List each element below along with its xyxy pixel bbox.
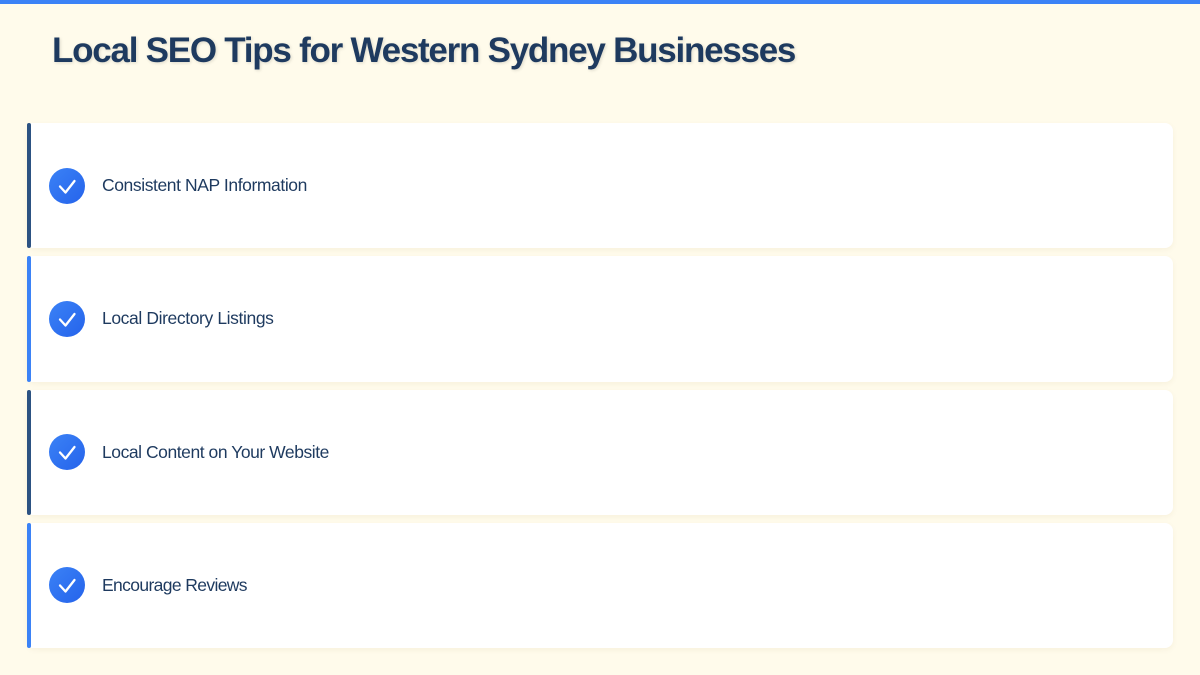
tip text: Consistent NAP Information (102, 175, 307, 195)
panel: encourage reviews (27, 523, 1173, 648)
card accent bar (27, 390, 31, 515)
icon: check mark (49, 567, 85, 603)
title: Local SEO Tips for Western Sydney Businesses (52, 31, 795, 70)
panel: local content on your website (27, 390, 1173, 515)
tip text: Encourage Reviews (102, 575, 247, 595)
tip text: Local Directory Listings (102, 308, 274, 328)
tip text: Local Content on Your Website (102, 442, 329, 462)
icon: check mark (49, 434, 85, 470)
icon: check mark (49, 168, 85, 204)
panel: consistent NAP information (27, 123, 1173, 248)
card accent bar (27, 123, 31, 248)
icon: check mark (49, 301, 85, 337)
card accent bar (27, 256, 31, 382)
card accent bar (27, 523, 31, 648)
top accent bar (0, 0, 1200, 4)
panel: local directory listings (27, 256, 1173, 382)
